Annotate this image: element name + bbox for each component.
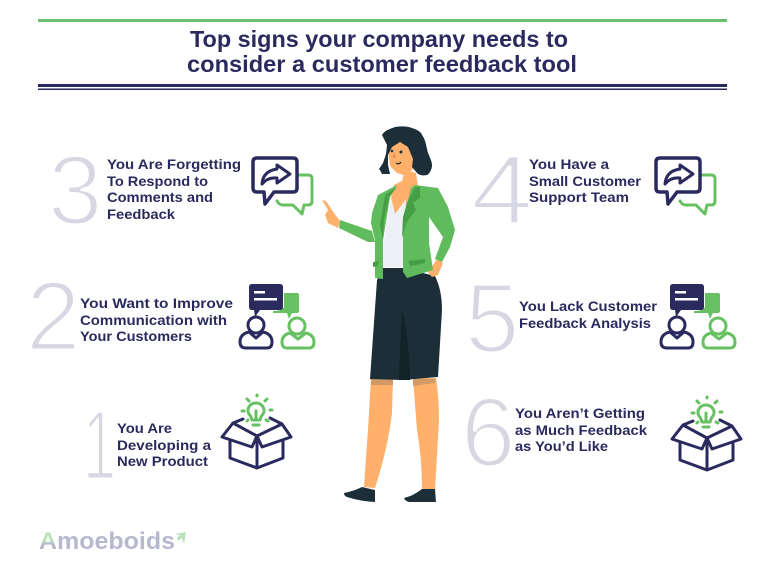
text: item 3 (107, 156, 241, 222)
icon: two people talking (661, 284, 735, 348)
logo arrow (175, 532, 186, 544)
header: title between rules (38, 19, 727, 90)
text: item 1 (117, 420, 211, 469)
text: item 4 (529, 156, 642, 205)
number 1: 1 (83, 390, 116, 500)
text: item 6: as Much Feedback (515, 422, 647, 438)
text: item 2 (80, 295, 233, 344)
item 3: forgetting to respond (48, 135, 312, 245)
face (388, 141, 415, 176)
text: item 2: Your Customers (80, 328, 192, 344)
item 4: small support team (471, 135, 715, 245)
text: item 3: Comments and (107, 189, 213, 205)
header: title between rules: Top signs your company needs to (190, 26, 568, 52)
number 3: 3 (48, 135, 103, 245)
item 1: new product (83, 390, 291, 500)
text: item 1: Developing a (117, 437, 211, 453)
item 2: improve communication (26, 261, 314, 371)
legs (364, 378, 439, 490)
text: item 4: Small Customer (529, 173, 642, 189)
icon: chat bubbles with share arrow (253, 158, 312, 214)
text: item 4: Support Team (529, 189, 629, 205)
hair (379, 126, 432, 175)
neck and chest (391, 170, 418, 215)
number 6: 6 (461, 377, 516, 487)
icon: open box with lightbulb (672, 397, 741, 470)
face details (391, 150, 402, 164)
shoes (344, 487, 436, 502)
jacket lapels and pockets (373, 187, 425, 267)
jacket sleeve left (339, 220, 375, 242)
text: item 5: Feedback Analysis (519, 315, 651, 331)
item 5: lack analysis (465, 263, 735, 373)
text: item 4: You Have a (529, 156, 609, 172)
text: item 6: as You’d Like (515, 438, 608, 454)
item 6: not enough feedback (461, 377, 741, 487)
number 2: 2 (26, 261, 81, 371)
text: item 1: New Product (117, 453, 208, 469)
skirt shadow on legs (371, 379, 436, 386)
icon: chat bubbles with share arrow (656, 158, 715, 214)
woman illustration pointing left (322, 126, 455, 502)
icon: two people talking (240, 284, 314, 348)
text: item 6: You Aren’t Getting (515, 405, 645, 421)
text: item 2: You Want to Improve (80, 295, 233, 311)
skirt (370, 268, 442, 380)
text: item 3: To Respond to (107, 173, 208, 189)
text: item 2: Communication with (80, 312, 227, 328)
jacket (371, 185, 455, 279)
number 5: 5 (465, 263, 520, 373)
icon: open box with lightbulb (222, 395, 291, 468)
text: item 1: You Are (117, 420, 172, 436)
text: item 5 (519, 298, 658, 331)
right hand (426, 259, 443, 277)
text: item 3: You Are Forgetting (107, 156, 241, 172)
number 4: 4 (471, 135, 533, 245)
header: title between rules: consider a customer feedback tool (187, 51, 577, 77)
text: item 6 (515, 405, 647, 454)
white shirt (383, 197, 406, 267)
text: item 3: Feedback (107, 206, 175, 222)
logo: Amoeboids: Amoeboids (39, 528, 175, 555)
pointing hand (322, 200, 340, 228)
text: item 5: You Lack Customer (519, 298, 658, 314)
